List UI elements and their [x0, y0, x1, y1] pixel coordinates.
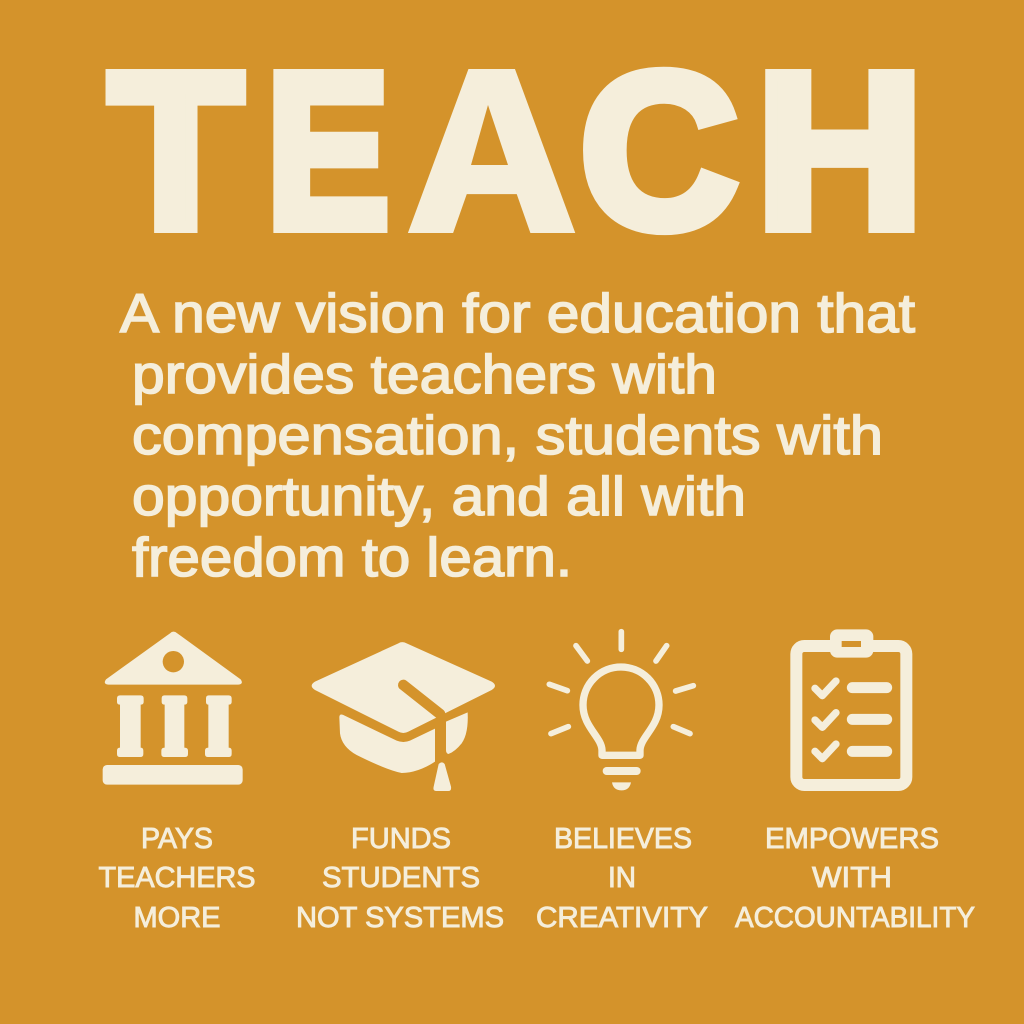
intro paragraph: freedom to learn.: [132, 526, 572, 588]
label: empowers with accountability: ACCOUNTABILITY: [735, 902, 975, 934]
icon: clipboard checklist: [796, 629, 906, 785]
label: pays teachers more: MORE: [134, 902, 220, 934]
icon: graduation cap: [312, 642, 495, 791]
label: funds students not systems: [296, 823, 504, 934]
label: pays teachers more: TEACHERS: [98, 862, 256, 894]
label: believes in creativity: CREATIVITY: [536, 902, 708, 934]
label: believes in creativity: IN: [608, 862, 636, 894]
title: C: [580, 27, 738, 274]
label: believes in creativity: BELIEVES: [554, 823, 692, 855]
title: E: [266, 28, 390, 275]
intro paragraph: compensation, students with: [132, 404, 883, 466]
icon: bank building: [103, 632, 243, 785]
label: empowers with accountability: EMPOWERS: [765, 823, 939, 855]
label: funds students not systems: FUNDS: [351, 823, 451, 855]
label: believes in creativity: [536, 823, 708, 934]
label: pays teachers more: [98, 823, 256, 934]
title: T: [109, 27, 243, 274]
intro paragraph: [120, 282, 915, 588]
title: A: [411, 28, 573, 275]
label: funds students not systems: STUDENTS: [322, 862, 480, 894]
label: funds students not systems: NOT SYSTEMS: [296, 902, 504, 934]
label: pays teachers more: PAYS: [141, 823, 213, 855]
intro paragraph: A new vision for education that: [120, 282, 915, 344]
icon: light bulb: [549, 632, 693, 790]
label: empowers with accountability: WITH: [812, 862, 892, 894]
title: H: [756, 28, 924, 275]
intro paragraph: opportunity, and all with: [132, 465, 746, 527]
intro paragraph: provides teachers with: [132, 343, 717, 405]
title: [109, 27, 924, 275]
label: empowers with accountability: [735, 823, 975, 934]
